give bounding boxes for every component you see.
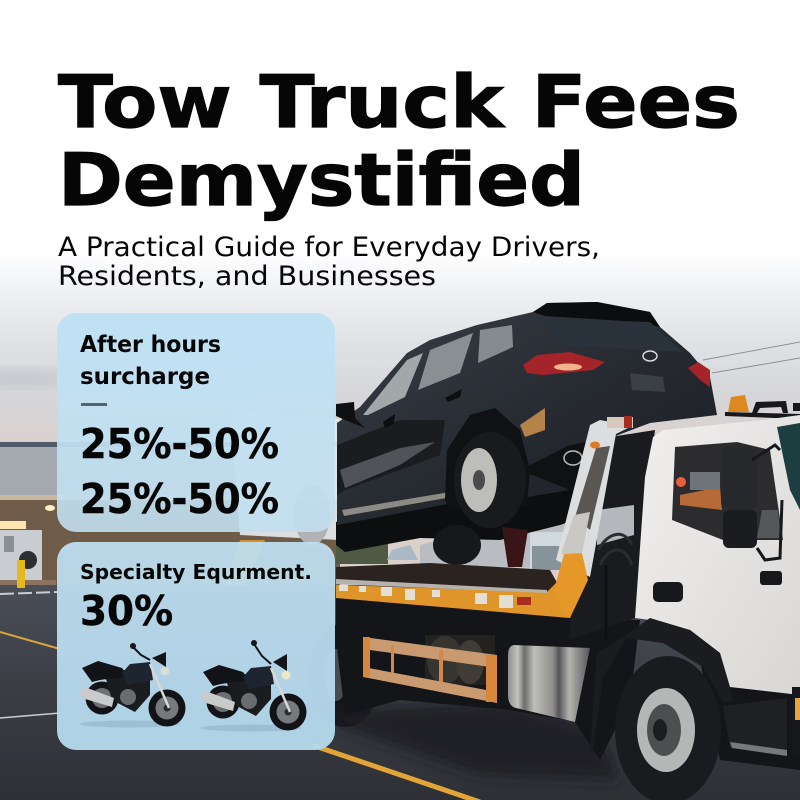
truck cab body — [635, 415, 800, 695]
value: 25%-50% second line: 25%-50% — [80, 475, 279, 523]
front bumper — [723, 698, 787, 753]
cables and engine under deck — [425, 635, 495, 685]
front hub — [637, 688, 695, 772]
fuel tank — [508, 645, 590, 722]
heading: after hours surcharge — [80, 332, 221, 390]
panel: after hours surcharge — [57, 313, 335, 532]
subtitle — [58, 232, 600, 292]
subtitle: Residents, and Businesses — [58, 261, 436, 292]
title — [58, 60, 740, 222]
badge — [643, 351, 657, 361]
clouds — [0, 370, 70, 386]
large side mirror — [721, 445, 782, 560]
left tail light — [523, 352, 605, 375]
power lines — [703, 342, 800, 373]
roof light bar — [725, 401, 800, 419]
value: 30%: 30% — [80, 587, 173, 635]
yellow bollard — [17, 560, 25, 588]
flatbed silver edge — [336, 579, 547, 593]
road shadow under truck — [330, 700, 620, 780]
front side window — [363, 353, 423, 415]
dark under-cab area — [700, 660, 800, 770]
rear bumper dark band — [520, 437, 630, 490]
truck chassis — [336, 598, 640, 760]
tow headboard frame — [554, 416, 633, 618]
spoiler — [533, 302, 660, 327]
road markings — [0, 592, 480, 800]
red tow strap — [502, 527, 528, 567]
body reflection — [337, 420, 445, 495]
front tyre — [615, 656, 721, 800]
towed black car — [336, 302, 717, 567]
middle side window — [418, 333, 473, 390]
small mirror — [760, 571, 782, 585]
car rear wheel — [454, 432, 526, 528]
exhaust — [564, 451, 582, 465]
icon: motorcycle left — [80, 643, 186, 728]
car body — [337, 302, 717, 525]
rear side window — [478, 325, 513, 363]
heading: specialty equipment: Specialty Equrment. — [80, 560, 312, 584]
title: Demystified — [58, 138, 585, 222]
panel: specialty equipment — [57, 542, 335, 750]
wheel arch fender — [590, 618, 733, 750]
ghost vehicle behind the first panel — [225, 410, 345, 585]
icon: motorcycle right — [201, 640, 306, 732]
beacon light — [728, 395, 749, 412]
side guard frame — [363, 637, 497, 703]
title: Tow Truck Fees — [58, 60, 740, 144]
flatbed orange side — [336, 552, 590, 618]
background gap behind headboard — [597, 505, 634, 545]
door handle — [653, 582, 683, 602]
depot building — [0, 442, 340, 585]
cab window — [672, 442, 783, 540]
side mirror — [336, 402, 365, 428]
trees and car in background — [336, 542, 418, 564]
wheel arch — [445, 408, 530, 510]
hanging front wheel — [433, 525, 481, 565]
headboard hoses — [598, 534, 632, 640]
cab interior detail — [676, 472, 781, 538]
value: 25%-50% first line: 25%-50% — [80, 420, 279, 468]
car underside — [336, 477, 630, 552]
licence plate — [630, 373, 665, 392]
panel background — [57, 542, 335, 750]
flatbed deck surface — [336, 563, 560, 592]
headlight — [792, 687, 800, 757]
heading: after hours surcharge: surcharge — [80, 364, 210, 390]
subtitle: A Practical Guide for Everyday Drivers, — [58, 232, 600, 263]
right tail light — [688, 362, 710, 387]
windshield — [777, 423, 800, 510]
bumper step — [730, 742, 787, 756]
background building behind truck — [420, 505, 640, 570]
door handles — [445, 389, 462, 402]
sky — [0, 0, 800, 600]
road — [0, 585, 800, 800]
short dash — [81, 403, 107, 406]
heading: after hours surcharge: After hours — [80, 332, 221, 358]
panel background — [57, 313, 335, 532]
rear window — [535, 318, 683, 352]
sunset reflection on bumper — [520, 408, 545, 437]
truck rear cab structure — [570, 430, 655, 640]
rear wheel — [309, 623, 381, 727]
deck reflectors — [339, 585, 531, 608]
